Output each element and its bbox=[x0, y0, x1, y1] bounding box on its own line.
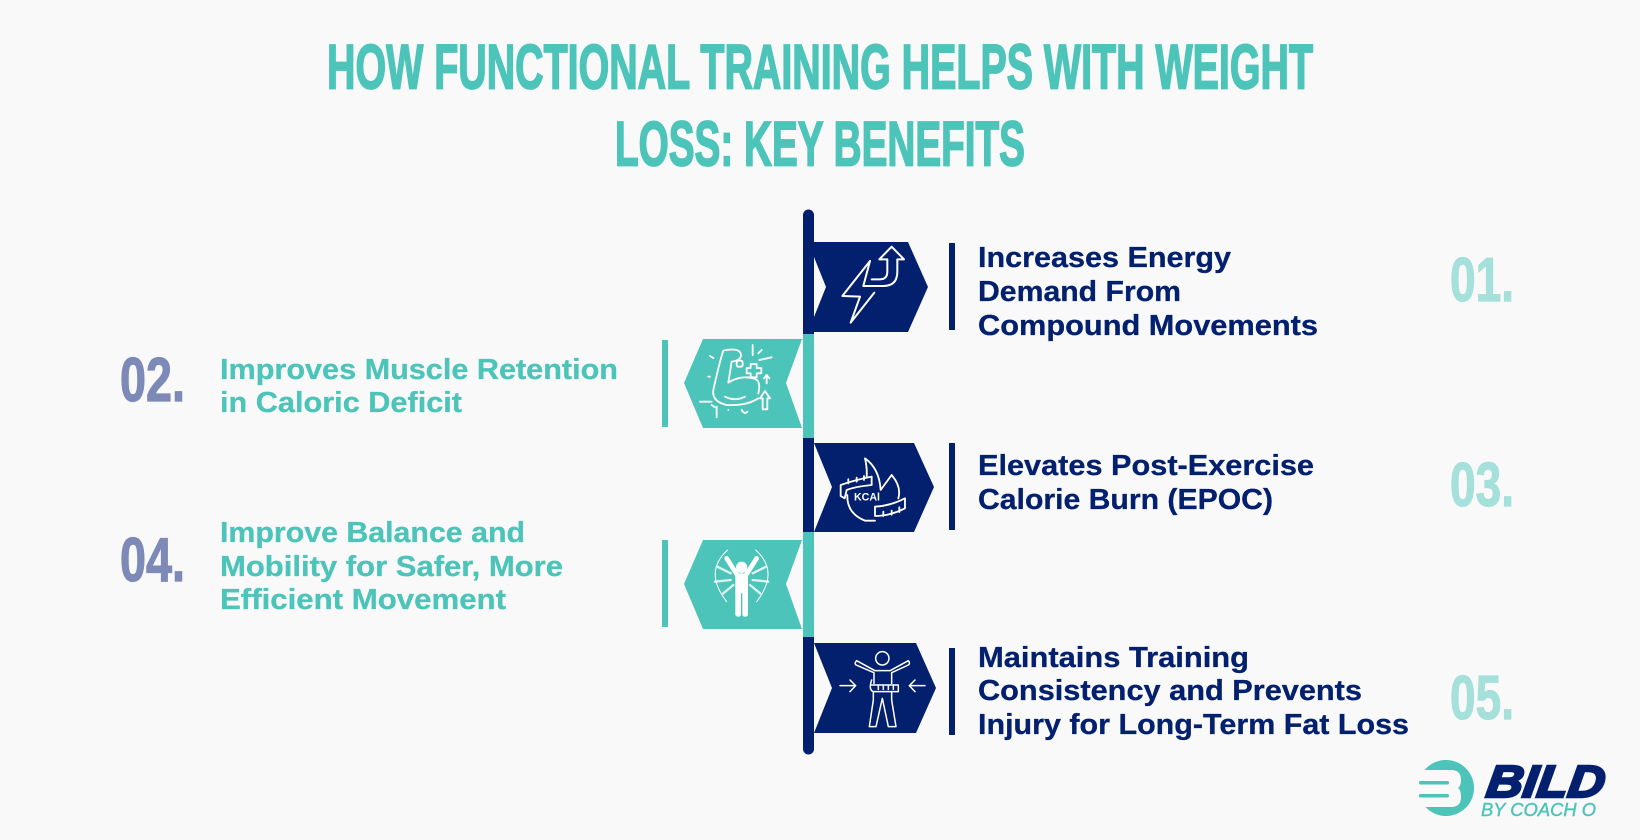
text: Compound Movements bbox=[978, 310, 1318, 342]
text bbox=[220, 517, 563, 616]
divider bar bbox=[949, 243, 955, 330]
icon: person with raised arms bbox=[715, 550, 768, 617]
logo tagline: BY COACH O bbox=[1481, 800, 1596, 820]
number: 03. bbox=[1450, 451, 1514, 520]
item 03 bbox=[814, 443, 1514, 532]
text: Mobility for Safer, More bbox=[220, 551, 563, 583]
logo wordmark: BILD bbox=[1484, 756, 1609, 807]
text bbox=[978, 242, 1318, 342]
number: 04. bbox=[120, 526, 185, 595]
icon: body with waist tape bbox=[840, 652, 925, 727]
text: Demand From bbox=[978, 276, 1181, 308]
text: Improve Balance and bbox=[220, 517, 525, 549]
flag 01 bbox=[814, 242, 928, 332]
flag 04 bbox=[684, 540, 802, 629]
item 04 bbox=[120, 517, 802, 629]
item 01 bbox=[814, 242, 1514, 342]
icon: flexed arm bbox=[700, 345, 772, 417]
icon: kcal flame and tape: KCAl bbox=[854, 492, 880, 504]
text: Increases Energy bbox=[978, 242, 1231, 274]
text: Consistency and Prevents bbox=[978, 675, 1362, 707]
text: Calorie Burn (EPOC) bbox=[978, 484, 1273, 516]
text: Injury for Long-Term Fat Loss bbox=[978, 709, 1409, 741]
divider bar bbox=[662, 540, 668, 627]
text bbox=[978, 642, 1409, 741]
flag 05 bbox=[814, 643, 936, 733]
divider bar bbox=[662, 340, 668, 427]
flag 02 bbox=[684, 339, 802, 428]
number: 01. bbox=[1450, 246, 1514, 315]
flag 03 bbox=[814, 443, 934, 532]
text: Elevates Post-Exercise bbox=[978, 450, 1314, 482]
divider bar bbox=[949, 443, 955, 530]
icon: lightning bolt with up arrow bbox=[842, 247, 904, 323]
number: 02. bbox=[120, 346, 185, 415]
text: in Caloric Deficit bbox=[220, 387, 462, 419]
number: 05. bbox=[1450, 664, 1514, 733]
item 05 bbox=[814, 642, 1514, 741]
title bbox=[327, 32, 1313, 180]
logo bbox=[1416, 756, 1609, 820]
text: Efficient Movement bbox=[220, 584, 506, 616]
logo mark bbox=[1416, 760, 1474, 816]
text: Maintains Training bbox=[978, 642, 1249, 674]
title: LOSS: KEY BENEFITS bbox=[615, 110, 1025, 180]
divider bar bbox=[949, 648, 955, 735]
icon: kcal flame and tape bbox=[841, 458, 905, 521]
text: Improves Muscle Retention bbox=[220, 354, 618, 386]
text bbox=[978, 450, 1314, 516]
timeline pole bbox=[803, 210, 814, 755]
item 02 bbox=[120, 339, 802, 428]
text bbox=[220, 354, 618, 419]
